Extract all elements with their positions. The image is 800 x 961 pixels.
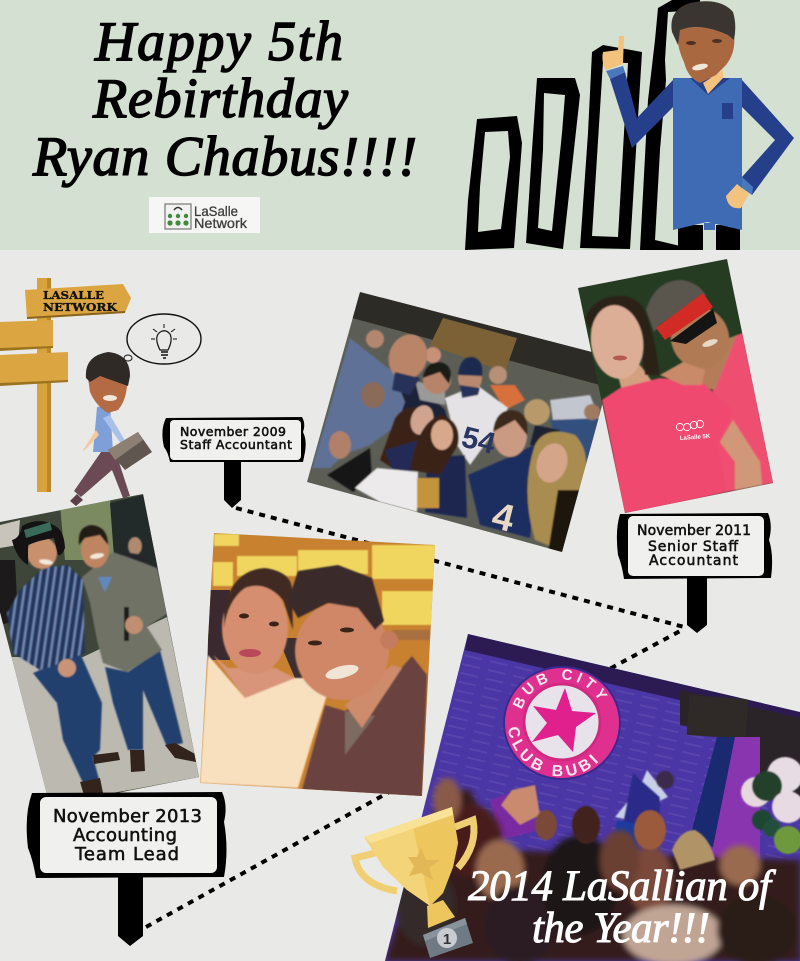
milestone sign: November 2009: November 2009 [180, 424, 286, 439]
page background [0, 250, 800, 961]
header band [0, 0, 800, 250]
title [32, 11, 417, 188]
signpost [0, 278, 131, 492]
milestone sign: November 2013: Accounting [73, 825, 177, 846]
icon: gold trophy: 1 [443, 931, 451, 948]
title: Rebirthday [92, 68, 348, 130]
caption: 2014 LaSallian of the Year: the Year!!! [532, 905, 710, 952]
caption: 2014 LaSallian of the Year [468, 863, 776, 952]
milestone sign: November 2009 [162, 417, 306, 508]
connector: dotted timeline [146, 508, 688, 927]
photo: Bears game group [307, 292, 602, 552]
crowd [385, 778, 800, 961]
photo: Bub City stage [385, 634, 800, 961]
title: Happy 5th [94, 11, 343, 73]
photo: Bears game group: 54 [458, 421, 499, 461]
milestone sign: November 2013: November 2013 [53, 806, 202, 827]
icon: gold trophy [355, 807, 474, 958]
milestone sign: November 2011: Accountant [649, 553, 738, 569]
photo: friends in pink shirts [570, 255, 780, 517]
photo: friends in pink shirts: LaSalle 5K [680, 434, 711, 442]
walking man with briefcase [70, 352, 152, 506]
photo: Bears game group: 4 [488, 495, 518, 541]
growth bars [465, 0, 700, 250]
LaSalle Network logo: Network [194, 215, 248, 231]
signpost: LASALLE [43, 289, 104, 302]
milestone sign: November 2013: Team Lead [74, 844, 179, 865]
photo: couple at the bar [195, 530, 440, 800]
title: Ryan Chabus!!!! [32, 126, 417, 188]
milestone sign: November 2009: Staff Accountant [180, 437, 292, 452]
thought bubble with lightbulb [124, 314, 201, 364]
club logo: BUB CITY [512, 669, 608, 709]
signpost: NETWORK [43, 301, 117, 314]
milestone sign: November 2011: November 2011 [637, 523, 751, 539]
milestone sign: November 2011: Senior Staff [648, 539, 738, 555]
club logo [503, 666, 621, 780]
LaSalle Network logo [149, 197, 260, 233]
photo: two men on the street [0, 490, 205, 810]
club logo: CLUB BUBI [508, 727, 598, 776]
milestone sign: November 2013 [27, 792, 226, 946]
caption: 2014 LaSallian of the Year: 2014 LaSallian of [468, 863, 776, 910]
businessman figure with pasted face [602, 1, 794, 250]
LaSalle Network logo: LaSalle [194, 203, 238, 219]
milestone sign: November 2011 [617, 513, 772, 633]
